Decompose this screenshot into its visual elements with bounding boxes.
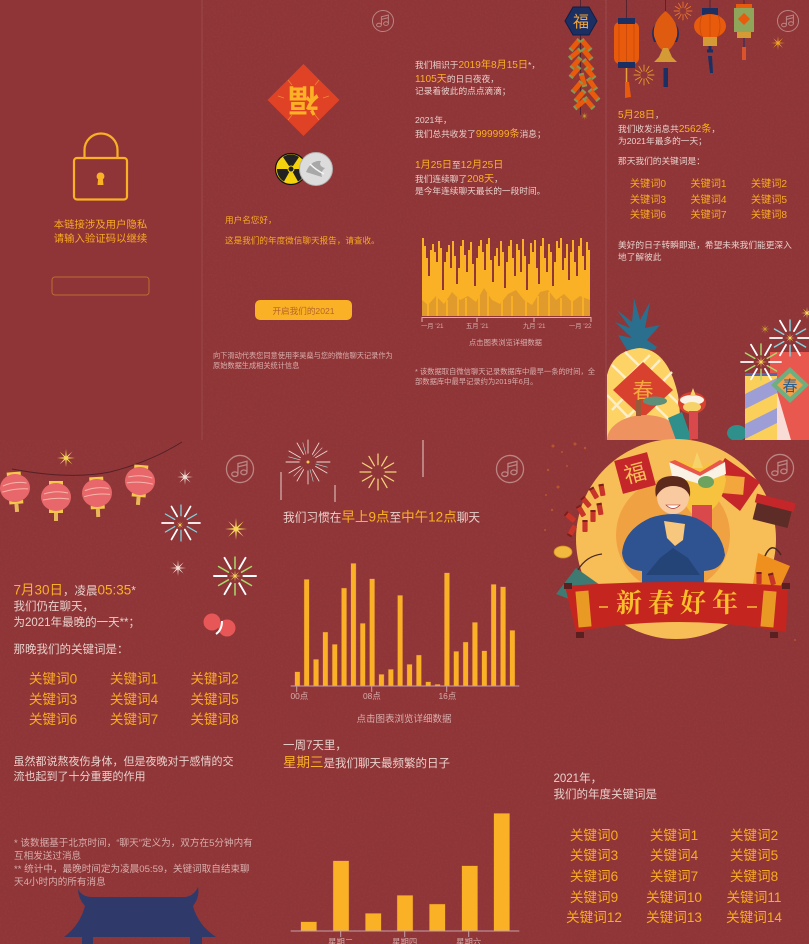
top day text: 5月28日， xyxy=(618,109,664,121)
keyword grid: 关键词7 xyxy=(110,712,158,727)
bar chart: hourly: 00点 xyxy=(290,691,308,701)
keyword grid: 关键词12 xyxy=(566,910,622,925)
longest streak text: 我们连续聊了208天， xyxy=(415,173,503,185)
chart: daily messages xyxy=(421,238,592,330)
panel: annual keywords xyxy=(544,439,796,925)
keyword grid: 关键词14 xyxy=(726,910,782,925)
icon: inverted fu diamond: 福 xyxy=(288,82,319,117)
illustration: gate roof xyxy=(64,887,216,944)
illustration: pineapple and fireworks: 春 xyxy=(632,380,654,403)
footnotes: ** 统计中，最晚时间定为凌晨05:59，关键词取自结束聊 xyxy=(14,863,250,875)
keyword grid: 关键词2 xyxy=(751,177,787,190)
keyword grid: 关键词8 xyxy=(730,869,778,884)
fu sign xyxy=(614,452,656,494)
closing text: 美好的日子转瞬即逝，希望未来我们能更深入 xyxy=(618,239,792,250)
weekly heading: 一周7天里， xyxy=(283,739,347,752)
chart: daily messages: 一月 '22 xyxy=(569,322,592,330)
annual keyword heading: 2021年， xyxy=(554,771,602,785)
closing text: 地了解彼此 xyxy=(618,251,662,262)
keyword grid: 关键词7 xyxy=(690,208,727,221)
latest night text: 那晚我们的关键词是： xyxy=(14,642,128,656)
keyword grid: 关键词0 xyxy=(630,177,666,190)
panel: hourly and weekly charts xyxy=(281,440,524,944)
keyword grid: 关键词10 xyxy=(646,890,702,905)
keyword grid xyxy=(29,672,239,727)
start button xyxy=(255,300,352,320)
panel: unlock screen xyxy=(52,134,149,295)
message count text xyxy=(415,114,546,140)
keyword grid: 关键词5 xyxy=(730,848,778,863)
keyword grid: 关键词7 xyxy=(650,869,698,884)
confetti speckles xyxy=(544,442,796,641)
longest streak text: 是今年连续聊天最长的一段时间。 xyxy=(415,185,545,196)
panel: chat totals xyxy=(415,0,600,386)
top day text: 那天我们的关键词是： xyxy=(618,155,705,166)
greeting text xyxy=(225,214,380,246)
chart: daily messages: 五月 '21 xyxy=(466,322,489,330)
latest night text xyxy=(14,582,140,656)
keyword grid: 关键词4 xyxy=(690,193,727,206)
keyword grid: 关键词2 xyxy=(730,828,778,843)
keyword grid: 关键词3 xyxy=(570,848,618,863)
weekly heading: 星期三是我们聊天最频繁的日子 xyxy=(283,755,450,770)
keyword grid: 关键词4 xyxy=(110,692,159,707)
chart: daily messages: 九月 '21 xyxy=(523,321,546,330)
met date text: 记录着彼此的点点滴滴； xyxy=(415,85,511,96)
keyword grid: 关键词1 xyxy=(690,177,727,190)
festive scroll banner: 新春好年 xyxy=(616,588,744,618)
top day text: 为2021年最多的一天； xyxy=(618,135,707,146)
decoration: fireworks xyxy=(281,440,423,502)
keyword grid xyxy=(630,177,787,221)
keyword grid: 关键词8 xyxy=(190,712,239,727)
closing text: 虽然都说熬夜伤身体，但是夜晚对于感情的交 xyxy=(14,754,234,768)
message count text: 我们总共收发了999999条消息； xyxy=(415,127,546,140)
keyword grid: 关键词8 xyxy=(751,208,787,221)
footnotes: 互相发送过消息 xyxy=(14,850,82,862)
keyword grid: 关键词6 xyxy=(570,869,618,884)
panel: busiest day xyxy=(607,0,809,465)
keyword grid: 关键词3 xyxy=(630,193,666,206)
avatar: radiation symbol xyxy=(276,154,306,184)
met date text xyxy=(415,58,540,96)
icon: music xyxy=(226,455,254,483)
keyword grid xyxy=(566,828,782,925)
message count text: 2021年， xyxy=(415,114,452,125)
chart: daily messages: 一月 '21 xyxy=(421,322,444,330)
footnotes: * 该数据基于北京时间，“聊天”定义为，双方在5分钟内有 xyxy=(14,837,253,849)
input box xyxy=(52,277,149,295)
keyword grid: 关键词3 xyxy=(29,692,77,707)
met date text: 我们相识于2019年8月15日*， xyxy=(415,58,540,71)
consent note: 原始数据生成相关统计信息 xyxy=(213,361,299,370)
chart hint: 点击图表浏览详细数据 xyxy=(469,338,542,347)
footnote: 部数据库中最早记录约为2019年6月。 xyxy=(415,377,537,386)
keyword grid: 关键词0 xyxy=(570,828,619,843)
decoration: hanging lanterns xyxy=(614,0,754,98)
bar chart: weekly xyxy=(291,813,519,944)
keyword grid: 关键词9 xyxy=(570,890,618,905)
decoration: lantern string xyxy=(0,442,182,521)
keyword grid: 关键词11 xyxy=(727,890,781,905)
icon: music xyxy=(372,10,394,32)
bar chart: hourly: 16点 xyxy=(438,691,456,701)
hourly heading: 我们习惯在早上9点至中午12点聊天 xyxy=(283,510,480,524)
bar chart: hourly xyxy=(290,563,519,701)
verification prompt: 本链接涉及用户隐私 xyxy=(54,218,147,231)
decoration: firecrackers xyxy=(565,0,600,120)
annual keyword heading: 我们的年度关键词是 xyxy=(554,787,657,801)
decoration: fireworks and star xyxy=(634,2,785,85)
gold coin xyxy=(554,546,572,558)
keyword grid: 关键词5 xyxy=(751,193,787,206)
verification prompt: 请输入验证码以继续 xyxy=(54,232,147,245)
met date text: 1105天的日日夜夜， xyxy=(415,73,499,85)
icon: music xyxy=(496,455,524,483)
green bag xyxy=(556,554,602,605)
orange bag xyxy=(752,548,790,592)
festive scroll banner xyxy=(564,582,790,638)
icon: padlock xyxy=(74,134,127,200)
keyword grid: 关键词0 xyxy=(29,672,78,686)
gift box xyxy=(751,494,796,528)
closing text: 流也起到了十分重要的作用 xyxy=(14,769,146,783)
chart hint: 点击图表浏览详细数据 xyxy=(356,713,452,725)
icon: music xyxy=(778,10,798,32)
consent note: 向下滑动代表您同意使用李昊燊与您的微信聊天记录作为 xyxy=(213,351,393,360)
icon: inverted fu diamond xyxy=(268,64,340,136)
bar chart: hourly: 08点 xyxy=(363,691,381,701)
fu sign: 福 xyxy=(621,459,649,488)
decoration: firecrackers: 福 xyxy=(573,13,589,31)
panel: latest night xyxy=(0,442,260,944)
latest night text: 我们仍在聊天， xyxy=(14,599,94,613)
keyword grid: 关键词1 xyxy=(110,672,158,686)
boy xyxy=(622,476,725,590)
footnote: * 该数据取自微信聊天记录数据库中最早一条的时间，全 xyxy=(415,367,596,376)
longest streak text xyxy=(415,159,545,196)
top day text xyxy=(618,109,720,166)
keyword grid: 关键词2 xyxy=(190,672,239,686)
footnotes: 天4小时内的所有消息 xyxy=(14,876,106,888)
keyword grid: 关键词13 xyxy=(646,910,702,925)
illustration: new year boy scene xyxy=(544,439,796,641)
weekly heading xyxy=(283,739,450,770)
decoration: fireworks xyxy=(57,449,260,600)
top day text: 我们收发消息共2562条， xyxy=(618,122,720,135)
keyword grid: 关键词6 xyxy=(29,712,77,727)
latest night text: 为2021年最晚的一天**； xyxy=(14,615,140,629)
keyword grid: 关键词1 xyxy=(650,828,698,843)
start button: 开启我们的2021 xyxy=(272,305,335,316)
keyword grid: 关键词6 xyxy=(630,208,666,221)
longest streak text: 1月25日至12月25日 xyxy=(415,159,503,171)
illustration: pineapple and fireworks: 春 xyxy=(782,378,798,395)
illustration: pineapple and fireworks xyxy=(607,298,809,440)
greeting text: 这是我们的年度微信聊天报告，请查收。 xyxy=(225,234,380,246)
keyword grid: 关键词4 xyxy=(650,848,699,863)
lion head xyxy=(669,452,760,535)
firecracker string xyxy=(564,484,606,537)
latest night text: 7月30日，凌晨05:35* xyxy=(14,582,136,598)
avatar: silver coin xyxy=(300,152,332,186)
panel: greeting xyxy=(213,10,394,370)
keyword grid: 关键词5 xyxy=(190,692,239,707)
icon: music xyxy=(766,454,794,482)
greeting text: 用户名您好， xyxy=(225,214,277,225)
decoration: plum blossom xyxy=(204,614,236,636)
